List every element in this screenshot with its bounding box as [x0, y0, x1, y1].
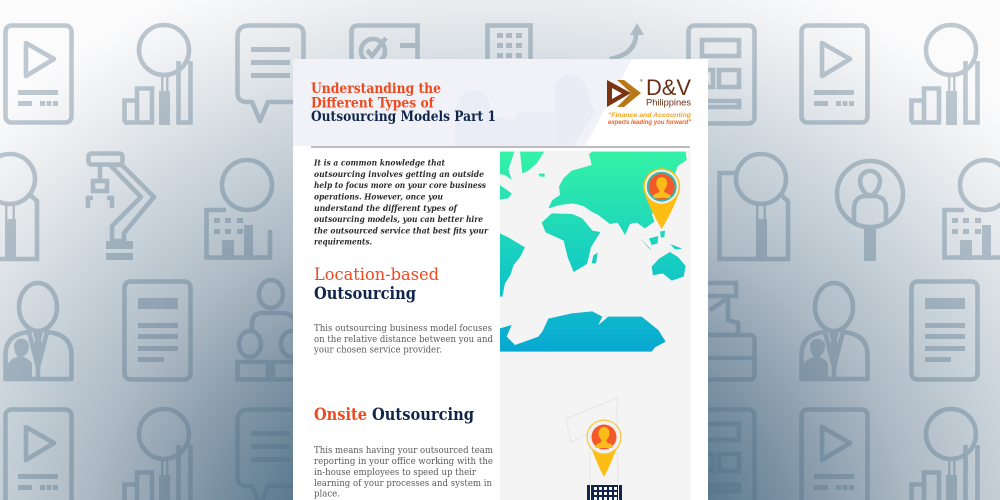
intro paragraph: It is a common knowledge that: [313, 158, 445, 168]
icon: group of people: [238, 280, 303, 380]
body: onsite description: This means having your outsourced team: [314, 445, 493, 456]
icon: chart magnifier row 1 right: [911, 25, 978, 125]
icon: layout document row 1: [688, 26, 754, 124]
icon: speech bubble row 1: [238, 26, 304, 121]
header banner: [293, 59, 632, 146]
heading: Onsite Outsourcing: Outsourcing: [372, 405, 474, 425]
title: [311, 81, 496, 125]
heading: Location-based Outsourcing: Outsourcing: [314, 284, 416, 304]
icon: logo arrows: [607, 80, 641, 107]
logo: D&V Philippines: ®: [640, 78, 643, 83]
icon: certificate check: [352, 26, 420, 70]
body: location-based description: This outsourcing business model focuses: [314, 323, 492, 334]
icon: video document row 1: [6, 26, 72, 122]
icon: document magnifier left: [0, 154, 37, 259]
body: onsite description: place.: [314, 488, 340, 500]
panel: infographic sheet: [293, 59, 708, 500]
icon: document right: [912, 282, 978, 380]
body: onsite description: [314, 445, 493, 500]
intro paragraph: outsourcing models, you can better hire: [314, 214, 483, 224]
illustration column background: [500, 151, 691, 500]
header rule: [311, 146, 690, 148]
icon: robot arm: [88, 154, 154, 260]
icon: chart magnifier row 4: [124, 409, 191, 500]
icon: video document row 4: [6, 410, 72, 500]
icon: document left: [124, 282, 190, 380]
body: location-based description: on the relative distance between you and: [314, 334, 493, 345]
body: location-based description: [313, 323, 493, 356]
intro paragraph: [313, 158, 489, 246]
logo: D&V Philippines: "Finance and Accounting: [608, 112, 691, 119]
icon: office building: [587, 485, 622, 500]
icon: building magnifier right: [944, 160, 1000, 260]
map pin: [643, 168, 680, 229]
title: Different Types of: [311, 96, 435, 112]
icon: video document row 4 right: [802, 410, 868, 500]
icon: office block: [488, 26, 530, 86]
logo: D&V Philippines: Philippines: [646, 98, 691, 108]
intro paragraph: understand the different types of: [314, 203, 458, 213]
icon: document magnifier right: [720, 154, 788, 259]
heading: Location-based Outsourcing: Location-based: [314, 265, 439, 285]
intro paragraph: outsourcing involves getting an outside: [314, 169, 484, 179]
world map: [500, 152, 687, 352]
icon: person magnifier: [837, 161, 903, 261]
number one outline: [566, 398, 618, 490]
icon: growth arrow: [610, 23, 644, 59]
body: onsite description: in-house employees to speed up their: [314, 467, 477, 478]
icon: person in suit right: [799, 283, 868, 381]
logo: D&V Philippines: D&V: [646, 75, 691, 100]
icon: person avatar: [653, 177, 670, 198]
title: Understanding the: [311, 81, 441, 97]
intro paragraph: requirements.: [314, 236, 372, 246]
heading: Location-based Outsourcing: [314, 265, 439, 304]
icon: layout document row 4: [688, 410, 754, 500]
intro paragraph: the outsourced service that best fits your: [314, 226, 489, 236]
icon: video document row 1 right: [802, 26, 868, 122]
title: Outsourcing Models Part 1: [311, 109, 496, 125]
icon: person in suit left: [3, 283, 72, 381]
heading: Onsite Outsourcing: Onsite: [314, 405, 367, 425]
body: onsite description: learning of your processes and system in: [314, 478, 492, 489]
heading: Onsite Outsourcing: [314, 405, 474, 425]
onsite pin: [586, 420, 622, 477]
icon: chart magnifier row 1: [124, 25, 191, 125]
logo: D&V Philippines: [607, 75, 692, 126]
icon: person avatar: [596, 427, 612, 448]
icon: stacked folders right: [700, 283, 754, 380]
intro paragraph: help to focus more on your core business: [314, 180, 486, 190]
logo: D&V Philippines: experts leading you forward": [608, 119, 692, 126]
icon: building magnifier: [206, 160, 272, 260]
icon: chart magnifier row 4 right: [911, 409, 978, 500]
icon: speech bubble row 4: [238, 410, 304, 500]
body: location-based description: your chosen service provider.: [313, 344, 442, 356]
body: onsite description: reporting in your office working with the: [314, 456, 493, 467]
intro paragraph: operations. However, once you: [314, 192, 443, 202]
